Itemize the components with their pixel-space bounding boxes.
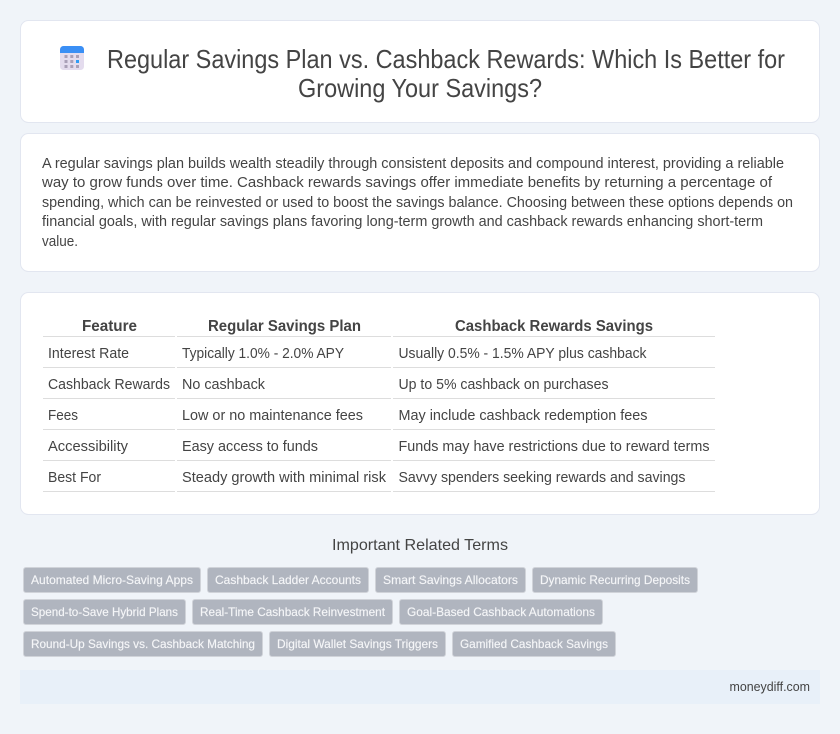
text block: summary paragraph: A regular savings plan builds wealth steadily through consistent deposits and compound interest, providing a reliable xyxy=(42,156,784,172)
row: best for xyxy=(48,470,686,486)
footer: moneydiff.com xyxy=(730,680,810,694)
row: interest rate xyxy=(48,346,647,362)
text block: summary paragraph: value. xyxy=(42,234,78,250)
related term tags: Cashback Ladder Accounts xyxy=(215,573,361,587)
related term tags: Digital Wallet Savings Triggers xyxy=(277,637,438,651)
related term tags: Gamified Cashback Savings xyxy=(460,637,608,651)
panel: comparison table xyxy=(20,292,820,514)
row: accessibility: Accessibility xyxy=(48,439,129,455)
related term tags: Goal-Based Cashback Automations xyxy=(407,605,595,619)
row: fees: Low or no maintenance fees xyxy=(182,408,363,424)
text block: summary paragraph: spending, which can be reinvested or used to boost the savings balance. Choosing between these options depends on xyxy=(42,195,793,211)
panel: summary text xyxy=(20,134,820,272)
related term tags: Round-Up Savings vs. Cashback Matching xyxy=(31,637,255,651)
row: fees xyxy=(48,408,648,424)
row: accessibility xyxy=(48,439,710,455)
row: interest rate: Interest Rate xyxy=(48,346,129,362)
title: Growing Your Savings? xyxy=(298,75,542,103)
row: fees: Fees xyxy=(48,408,78,424)
icon: calendar xyxy=(60,46,84,70)
related term tags: Automated Micro-Saving Apps xyxy=(31,573,193,587)
table header row: Feature xyxy=(82,318,137,335)
row: best for: Savvy spenders seeking rewards and savings xyxy=(398,470,686,486)
table header row xyxy=(82,318,653,335)
row: fees: May include cashback redemption fees xyxy=(398,408,648,424)
row: cashback rewards: Cashback Rewards xyxy=(48,377,170,393)
table rules xyxy=(43,336,715,492)
panel: title header xyxy=(20,20,820,122)
row: best for: Best For xyxy=(48,470,101,486)
text block: summary paragraph: financial goals, with regular savings plans favoring long-term growth and cashback rewards enhancing short-term xyxy=(42,214,763,230)
row: cashback rewards: Up to 5% cashback on purchases xyxy=(398,377,608,393)
row: cashback rewards xyxy=(48,377,608,393)
row: accessibility: Funds may have restrictions due to reward terms xyxy=(398,439,710,455)
related term tags: Spend-to-Save Hybrid Plans xyxy=(31,605,178,619)
row: best for: Steady growth with minimal risk xyxy=(182,470,387,486)
heading: important related terms: Important Related Terms xyxy=(332,537,508,554)
title: Regular Savings Plan vs. Cashback Rewards: Which Is Better for xyxy=(107,46,785,74)
related term tags: Smart Savings Allocators xyxy=(383,573,518,587)
related term tags: Dynamic Recurring Deposits xyxy=(540,573,690,587)
table header row: Cashback Rewards Savings xyxy=(455,318,653,335)
table header row: Regular Savings Plan xyxy=(208,318,361,335)
text block: summary paragraph: way to grow funds over time. Cashback rewards savings offer immediate benefits by returning a percentage of xyxy=(41,175,773,191)
related term tags xyxy=(24,568,698,656)
row: interest rate: Usually 0.5% - 1.5% APY plus cashback xyxy=(398,346,647,362)
footer xyxy=(20,670,820,704)
related term tags: Real-Time Cashback Reinvestment xyxy=(200,605,386,619)
text block: summary paragraph xyxy=(41,156,793,250)
title xyxy=(107,46,785,103)
row: accessibility: Easy access to funds xyxy=(182,439,318,455)
row: cashback rewards: No cashback xyxy=(182,377,266,393)
row: interest rate: Typically 1.0% - 2.0% APY xyxy=(182,346,344,362)
